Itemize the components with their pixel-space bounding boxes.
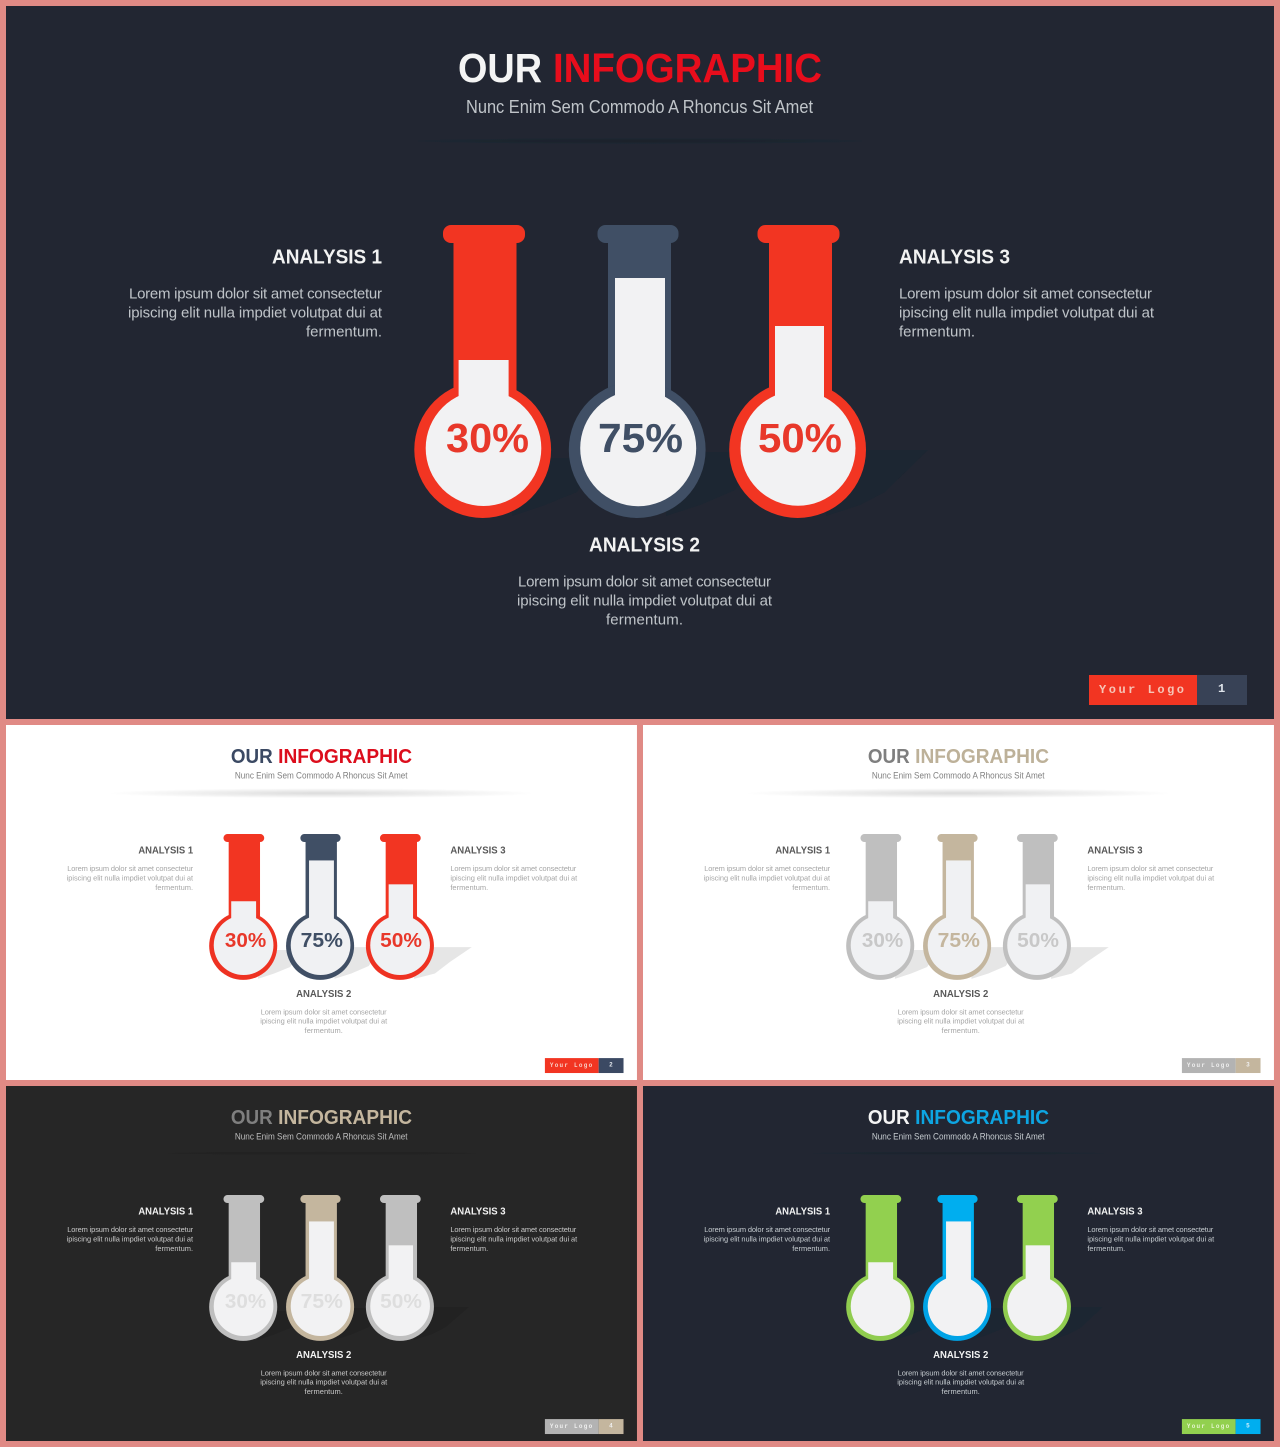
title: INFOGRAPHIC (915, 1107, 1049, 1129)
text block: analysis 3: ANALYSIS 3 (450, 845, 506, 856)
flask 1: green (846, 1195, 914, 1341)
text block: analysis 2: ANALYSIS 2 (589, 534, 700, 556)
logo badge (545, 1419, 624, 1434)
flask 2: 75%: 75% (938, 930, 980, 952)
text block: analysis 2: Lorem ipsum dolor sit amet consectetur (261, 1368, 387, 1377)
text block: analysis 1: Lorem ipsum dolor sit amet consectetur (704, 1225, 831, 1234)
flask 3: green (1003, 1195, 1071, 1341)
text block: analysis 3: fermentum. (450, 1244, 488, 1253)
flask 1: 30% (414, 225, 551, 518)
text block: analysis 1: Lorem ipsum dolor sit amet consectetur (704, 864, 831, 873)
flask 3: 50% (1003, 834, 1071, 980)
logo badge: 3 (1246, 1062, 1250, 1069)
subtitle: Nunc Enim Sem Commodo A Rhoncus Sit Amet (466, 97, 813, 117)
title: INFOGRAPHIC (915, 746, 1049, 768)
text block: analysis 2 (897, 989, 1025, 1035)
text block: analysis 2: ipiscing elit nulla impdiet volutpat dui at (897, 1017, 1025, 1026)
flask 3: 50% (366, 834, 434, 980)
flask 2: blue (923, 1195, 991, 1341)
text block: analysis 3: Lorem ipsum dolor sit amet consectetur (450, 864, 577, 873)
subtitle: Nunc Enim Sem Commodo A Rhoncus Sit Amet (872, 770, 1045, 780)
text block: analysis 1: fermentum. (792, 883, 830, 892)
flask 3: 50%: 50% (380, 1291, 422, 1313)
text block: analysis 2 (260, 1350, 388, 1396)
text block: analysis 2: ipiscing elit nulla impdiet volutpat dui at (897, 1378, 1025, 1387)
logo badge: Your Logo (550, 1062, 593, 1069)
flask 2: 75%: 75% (301, 1291, 343, 1313)
panel: white slide with grey and tan flasks (643, 725, 1274, 1080)
text block: analysis 3 (899, 246, 1155, 340)
text block: analysis 1: ANALYSIS 1 (775, 845, 831, 856)
text block: analysis 1: Lorem ipsum dolor sit amet consectetur (129, 286, 382, 302)
text block: analysis 2 (260, 989, 388, 1035)
text block: analysis 3 (1087, 845, 1215, 892)
flask 1: 30%: 30% (446, 415, 529, 461)
flask 1: 30% (846, 834, 914, 980)
text block: analysis 1: Lorem ipsum dolor sit amet consectetur (67, 1225, 194, 1234)
text block: analysis 1: ipiscing elit nulla impdiet volutpat dui at (67, 1234, 194, 1243)
logo badge: 2 (609, 1062, 613, 1069)
text block: analysis 2: ANALYSIS 2 (296, 1350, 352, 1361)
text block: analysis 1: ANALYSIS 1 (138, 845, 194, 856)
text block: analysis 1 (128, 246, 383, 340)
text block: analysis 3 (1087, 1206, 1215, 1253)
text block: analysis 2: fermentum. (305, 1387, 343, 1396)
logo badge (545, 1058, 624, 1073)
subtitle: Nunc Enim Sem Commodo A Rhoncus Sit Amet (872, 1131, 1045, 1141)
title: OUR (458, 45, 542, 91)
flask 3: 50% (729, 225, 866, 518)
logo badge: Your Logo (1187, 1423, 1230, 1430)
text block: analysis 2: fermentum. (305, 1026, 343, 1035)
text block: analysis 3: fermentum. (1087, 883, 1125, 892)
flask 1: 30% (209, 1195, 277, 1341)
text block: analysis 1 (704, 1206, 831, 1253)
subtitle: Nunc Enim Sem Commodo A Rhoncus Sit Amet (235, 770, 408, 780)
logo badge: 1 (1218, 682, 1225, 696)
text block: analysis 2: fermentum. (606, 612, 683, 628)
logo badge (1182, 1419, 1261, 1434)
title: OUR (231, 1107, 273, 1129)
flask 2: 75% (286, 834, 354, 980)
text block: analysis 1 (67, 845, 194, 892)
text block: analysis 2: fermentum. (942, 1387, 980, 1396)
text block: analysis 3: fermentum. (450, 883, 488, 892)
text block: analysis 3: ipiscing elit nulla impdiet volutpat dui at (450, 873, 578, 882)
text block: analysis 1: ipiscing elit nulla impdiet volutpat dui at (704, 873, 831, 882)
text block: analysis 3: ipiscing elit nulla impdiet volutpat dui at (450, 1234, 578, 1243)
title: OUR (868, 1107, 910, 1129)
logo badge: Your Logo (1099, 683, 1184, 697)
flask 2: 75% (286, 1195, 354, 1341)
text block: analysis 1: ipiscing elit nulla impdiet volutpat dui at (67, 873, 194, 882)
flask 1: 30%: 30% (862, 930, 903, 952)
text block: analysis 3: ipiscing elit nulla impdiet volutpat dui at (899, 304, 1155, 322)
text block: analysis 1 (704, 845, 831, 892)
text block: analysis 2: fermentum. (942, 1026, 980, 1035)
text block: analysis 3: Lorem ipsum dolor sit amet consectetur (1087, 1225, 1214, 1234)
title: OUR (868, 746, 910, 768)
text block: analysis 1: ANALYSIS 1 (138, 1206, 194, 1217)
text block: analysis 1: ANALYSIS 1 (272, 246, 382, 268)
subtitle: Nunc Enim Sem Commodo A Rhoncus Sit Amet (235, 1131, 408, 1141)
logo badge (1089, 675, 1247, 705)
text block: analysis 1: fermentum. (155, 1244, 193, 1253)
text block: analysis 3: ipiscing elit nulla impdiet volutpat dui at (1087, 873, 1215, 882)
text block: analysis 2: Lorem ipsum dolor sit amet consectetur (518, 574, 771, 590)
text block: analysis 1: fermentum. (306, 324, 382, 340)
flask 1: 30%: 30% (225, 1291, 266, 1313)
text block: analysis 3: ANALYSIS 3 (1087, 845, 1143, 856)
title: INFOGRAPHIC (278, 746, 412, 768)
text block: analysis 1 (67, 1206, 194, 1253)
text block: analysis 2: ANALYSIS 2 (296, 989, 352, 1000)
text block: analysis 3: fermentum. (1087, 1244, 1125, 1253)
text block: analysis 1: ANALYSIS 1 (775, 1206, 831, 1217)
text block: analysis 2: ipiscing elit nulla impdiet volutpat dui at (260, 1378, 388, 1387)
text block: analysis 2 (897, 1350, 1025, 1396)
text block: analysis 3: Lorem ipsum dolor sit amet consectetur (899, 286, 1152, 302)
flask 1: 30%: 30% (225, 930, 266, 952)
text block: analysis 3: ipiscing elit nulla impdiet volutpat dui at (1087, 1234, 1215, 1243)
text block: analysis 3: Lorem ipsum dolor sit amet consectetur (450, 1225, 577, 1234)
text block: analysis 2: Lorem ipsum dolor sit amet consectetur (898, 1007, 1024, 1016)
flask 3: 50%: 50% (1017, 930, 1059, 952)
text block: analysis 2: Lorem ipsum dolor sit amet consectetur (898, 1368, 1024, 1377)
flask 3: 50%: 50% (758, 415, 842, 461)
text block: analysis 2 (517, 534, 773, 628)
logo badge (1182, 1058, 1261, 1073)
text block: analysis 2: ipiscing elit nulla impdiet volutpat dui at (517, 592, 773, 610)
flask 3: 50% (366, 1195, 434, 1341)
text block: analysis 1: fermentum. (155, 883, 193, 892)
text block: analysis 3: ANALYSIS 3 (450, 1206, 506, 1217)
logo badge: Your Logo (1187, 1062, 1230, 1069)
text block: analysis 3 (450, 845, 578, 892)
flask 2: 75% (923, 834, 991, 980)
text block: analysis 1: ipiscing elit nulla impdiet volutpat dui at (128, 304, 383, 322)
flask 1: 30% (209, 834, 277, 980)
panel: white slide with red and navy flasks (6, 725, 637, 1080)
flask 2: 75%: 75% (301, 930, 343, 952)
title: OUR (231, 746, 273, 768)
text block: analysis 2: Lorem ipsum dolor sit amet consectetur (261, 1007, 387, 1016)
text block: analysis 3: ANALYSIS 3 (1087, 1206, 1143, 1217)
text block: analysis 1: fermentum. (792, 1244, 830, 1253)
title: INFOGRAPHIC (278, 1107, 412, 1129)
text block: analysis 3: fermentum. (899, 324, 975, 340)
text block: analysis 3: Lorem ipsum dolor sit amet consectetur (1087, 864, 1214, 873)
panel: dark slide with green and blue flasks (643, 1086, 1274, 1441)
text block: analysis 2: ANALYSIS 2 (933, 1350, 989, 1361)
text block: analysis 1: ipiscing elit nulla impdiet volutpat dui at (704, 1234, 831, 1243)
text block: analysis 1: Lorem ipsum dolor sit amet consectetur (67, 864, 194, 873)
title: INFOGRAPHIC (553, 45, 822, 91)
flask 2: 75% (569, 225, 706, 518)
text block: analysis 2: ANALYSIS 2 (933, 989, 989, 1000)
logo badge: 4 (609, 1423, 613, 1430)
flask 2: 75%: 75% (598, 415, 683, 461)
panel: main dark slide with red flasks (6, 6, 1274, 719)
flask 3: 50%: 50% (380, 930, 422, 952)
text block: analysis 3: ANALYSIS 3 (899, 246, 1010, 268)
text block: analysis 2: ipiscing elit nulla impdiet volutpat dui at (260, 1017, 388, 1026)
logo badge: Your Logo (550, 1423, 593, 1430)
logo badge: 5 (1246, 1423, 1250, 1430)
text block: analysis 3 (450, 1206, 578, 1253)
panel: charcoal slide with grey and tan flasks (6, 1086, 637, 1441)
